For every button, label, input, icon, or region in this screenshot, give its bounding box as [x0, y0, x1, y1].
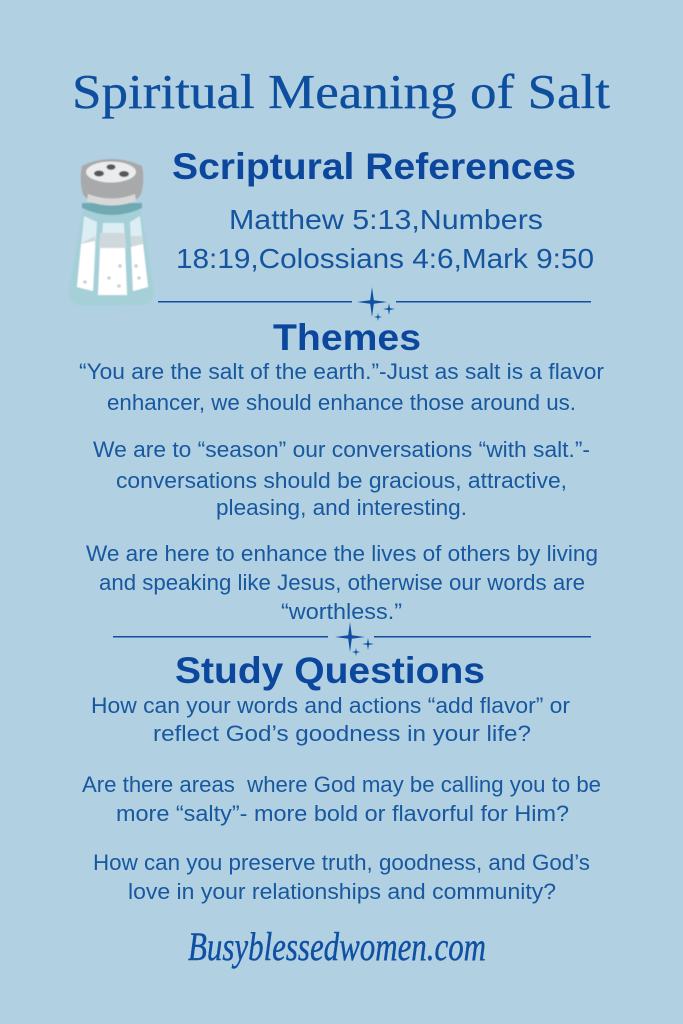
- text block: themes: We are here to enhance the lives of others by living: [86, 541, 598, 566]
- text block: study questions: How can your words and actions “add flavor” or: [91, 693, 570, 718]
- text block: study questions: more “salty”- more bold or flavorful for Him?: [116, 801, 569, 826]
- text block: scripture list: Matthew 5:13,Numbers: [229, 204, 543, 235]
- website credit: Busyblessedwomen.com: [188, 924, 486, 969]
- icon: salt shaker: [69, 159, 154, 306]
- text block: themes: We are to “season” our conversations “with salt.”-: [93, 437, 590, 462]
- heading: study questions: Study Questions: [175, 650, 485, 691]
- text block: study questions: Are there areas where God may be calling you to be: [82, 772, 601, 797]
- text block: themes: [79, 359, 604, 624]
- text block: study questions: reflect God’s goodness in your life?: [153, 721, 531, 746]
- text block: themes: and speaking like Jesus, otherwise our words are: [99, 570, 585, 595]
- title: Spiritual Meaning of Salt: [72, 64, 610, 119]
- divider with stars: upper: [158, 287, 591, 321]
- text block: themes: pleasing, and interesting.: [216, 495, 467, 520]
- heading: themes: Themes: [273, 317, 421, 358]
- text block: themes: conversations should be gracious, attractive,: [116, 468, 567, 493]
- heading: scriptural references: Scriptural References: [172, 146, 576, 187]
- text block: themes: “worthless.”: [281, 599, 402, 624]
- text block: study questions: [82, 693, 601, 904]
- text block: scripture list: 18:19,Colossians 4:6,Mark 9:50: [176, 243, 594, 274]
- text block: themes: “You are the salt of the earth.”-Just as salt is a flavor: [79, 359, 604, 384]
- divider with stars: lower: [113, 622, 591, 656]
- text block: scripture list: [176, 204, 594, 274]
- text block: themes: enhancer, we should enhance those around us.: [107, 390, 576, 415]
- text block: study questions: love in your relationships and community?: [128, 879, 556, 904]
- text block: study questions: How can you preserve truth, goodness, and God’s: [93, 850, 590, 875]
